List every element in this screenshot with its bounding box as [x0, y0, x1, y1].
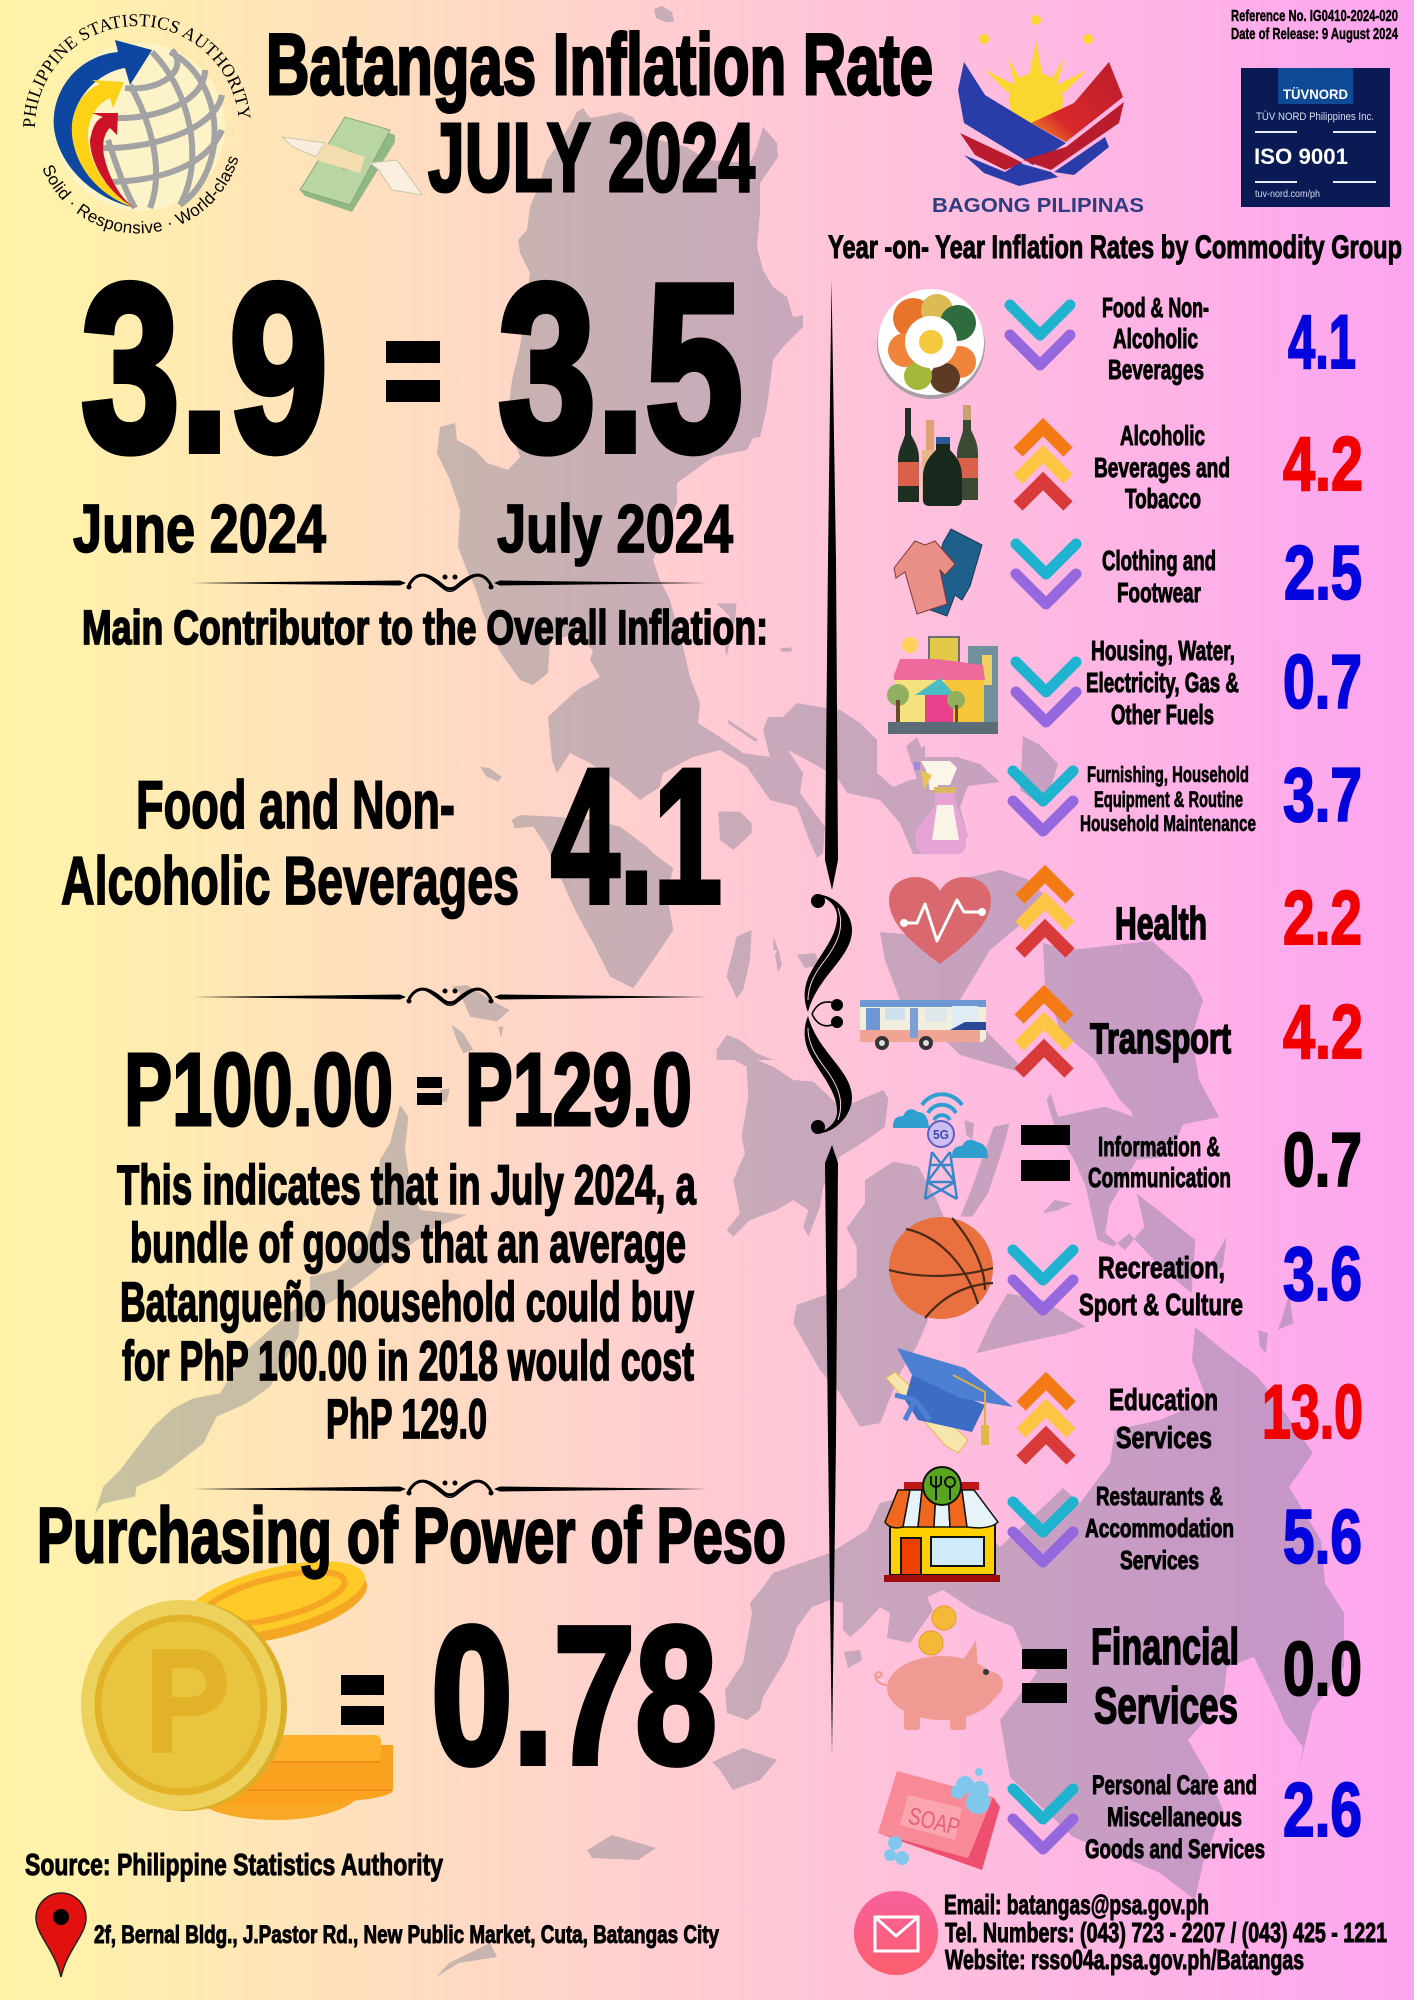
- value: 3.6: [1283, 1232, 1362, 1317]
- label: Financial: [1091, 1618, 1239, 1675]
- title: [266, 17, 933, 212]
- label: Information &: [1098, 1131, 1220, 1162]
- label: [1086, 635, 1239, 730]
- value: 0.0: [1283, 1627, 1362, 1712]
- explanatory paragraph: for PhP 100.00 in 2018 would cost: [122, 1329, 694, 1392]
- row: information and communication: [893, 1094, 1362, 1203]
- logo: Bagong Pilipinas: [932, 15, 1144, 217]
- label: [1088, 1131, 1231, 1193]
- heading: purchasing power of peso: Purchasing of Power of Peso: [37, 1491, 786, 1579]
- label: Other Fuels: [1111, 699, 1214, 730]
- row: housing, water, electricity, gas and other fuels: [887, 635, 1362, 734]
- label: Beverages: [1108, 354, 1204, 385]
- title: JULY 2024: [428, 103, 755, 212]
- row: clothing and footwear: [894, 529, 1362, 616]
- label: Communication: [1088, 1162, 1231, 1193]
- row: transport: [860, 990, 1363, 1075]
- icon: food plate: [877, 289, 985, 399]
- row: food and non-alcoholic beverages: [877, 289, 1356, 399]
- label: Household Maintenance: [1080, 811, 1256, 836]
- main contributor: food and non-alcoholic beverages: 4.1: [551, 730, 722, 943]
- label: Services: [1116, 1420, 1212, 1455]
- value: 13.0: [1262, 1370, 1363, 1455]
- icon: bottles: [898, 405, 978, 506]
- row: education services: [886, 1348, 1363, 1460]
- main contributor: food and non-alcoholic beverages: [61, 730, 722, 943]
- badge: TUV NORD ISO 9001: TÜVNORD: [1283, 86, 1348, 102]
- main contributor: food and non-alcoholic beverages: Food and Non-: [136, 767, 455, 843]
- icon: bus: [860, 1000, 986, 1050]
- label: [1091, 1618, 1239, 1734]
- headline: inflation rate comparison: [73, 236, 743, 567]
- label: Alcoholic: [1113, 323, 1198, 354]
- logo: Philippine Statistics Authority: [23, 14, 250, 234]
- label: Alcoholic: [1120, 420, 1205, 451]
- icon: winged money: [282, 117, 422, 212]
- label: [1102, 545, 1216, 608]
- peso comparison: P129.0: [465, 1032, 692, 1147]
- icon: 5G tower: 5G: [933, 1127, 949, 1142]
- trend: down: [1013, 1789, 1073, 1849]
- value: 3.7: [1283, 753, 1362, 838]
- trend: up: [1021, 1381, 1071, 1460]
- heading: main contributor: Main Contributor to the Overall Inflation:: [82, 602, 768, 655]
- label: [1109, 1382, 1218, 1455]
- label: Food & Non-: [1102, 292, 1209, 323]
- value: 0.7: [1283, 640, 1362, 725]
- label: Recreation,: [1098, 1250, 1225, 1285]
- row: alcoholic beverages and tobacco: [898, 405, 1363, 514]
- headline: inflation rate comparison: 3.5: [498, 236, 743, 501]
- icon: basketball: [889, 1217, 993, 1319]
- badge: TUV NORD ISO 9001: TÜV NORD Philippines Inc.: [1256, 111, 1374, 123]
- contact details: Email: batangas@psa.gov.ph: [944, 1889, 1209, 1920]
- icon: heart with pulse: [889, 877, 991, 964]
- value: 4.1: [1288, 300, 1356, 385]
- value: 5.6: [1283, 1495, 1362, 1580]
- label: Services: [1094, 1677, 1238, 1734]
- label: Equipment & Routine: [1094, 787, 1243, 812]
- explanatory paragraph: This indicates that in July 2024, a: [117, 1153, 697, 1216]
- purchasing power value: [341, 1586, 717, 1805]
- headline: inflation rate comparison: July 2024: [497, 491, 733, 567]
- label: Services: [1120, 1545, 1199, 1575]
- trend: down: [1013, 1250, 1073, 1310]
- label: Sport & Culture: [1079, 1287, 1243, 1322]
- trend: up: [1020, 874, 1070, 953]
- label: [1094, 420, 1230, 514]
- value: 4.2: [1283, 990, 1363, 1075]
- row: restaurants and accommodation services: [884, 1467, 1362, 1582]
- label: [1080, 762, 1256, 836]
- trend: unchanged: [1021, 1125, 1070, 1181]
- label: [1085, 1770, 1265, 1864]
- row: personal care and miscellaneous goods and services: [878, 1768, 1362, 1870]
- peso comparison: [124, 1032, 692, 1147]
- label: Health: [1115, 898, 1207, 949]
- value: 2.5: [1284, 531, 1362, 616]
- trend: up: [1019, 994, 1069, 1073]
- label: [1102, 292, 1209, 385]
- value: 0.7: [1283, 1118, 1362, 1203]
- purchasing power value: 0.78: [431, 1586, 717, 1805]
- explanatory paragraph: [117, 1153, 697, 1450]
- trend: down: [1010, 305, 1070, 365]
- logo: Philippine Statistics Authority: Solid · Responsive · World-class: [43, 156, 238, 234]
- label: Personal Care and: [1092, 1770, 1257, 1800]
- icon: piggy bank: [875, 1606, 1003, 1730]
- row: recreation, sport and culture: [889, 1217, 1362, 1322]
- explanatory paragraph: PhP 129.0: [326, 1387, 487, 1450]
- row: furnishing, household equipment and routine household maintenance: [914, 753, 1362, 854]
- label: Goods and Services: [1085, 1834, 1265, 1864]
- label: Miscellaneous: [1107, 1802, 1242, 1832]
- row: health: [889, 874, 1362, 964]
- icon: spray bottle: [914, 761, 966, 854]
- address: 2f, Bernal Bldg., J.Pastor Rd., New Public Market, Cuta, Batangas City: [94, 1921, 719, 1949]
- label: Restaurants &: [1096, 1481, 1223, 1511]
- label: Clothing and: [1102, 545, 1216, 576]
- icon: location pin: [36, 1893, 86, 1977]
- label: Housing, Water,: [1091, 635, 1235, 666]
- icon: 5G tower: [893, 1094, 988, 1199]
- label: Footwear: [1117, 577, 1201, 608]
- badge: TUV NORD ISO 9001: ISO 9001: [1254, 144, 1348, 169]
- icon: soap: SOAP: [906, 1803, 963, 1841]
- label: Electricity, Gas &: [1086, 667, 1239, 698]
- badge: TUV NORD ISO 9001: tuv-nord.com/ph: [1255, 189, 1320, 200]
- peso comparison: P100.00: [124, 1032, 393, 1147]
- headline: inflation rate comparison: June 2024: [73, 491, 326, 567]
- trend: unchanged: [1022, 1649, 1067, 1703]
- row: financial services: [875, 1606, 1362, 1734]
- trend: down: [1016, 662, 1076, 722]
- icon: mail: [854, 1891, 938, 1975]
- explanatory paragraph: bundle of goods that an average: [130, 1211, 686, 1274]
- label: Tobacco: [1125, 483, 1201, 514]
- label: Beverages and: [1094, 452, 1230, 483]
- badge: TUV NORD ISO 9001: [1241, 68, 1390, 207]
- label: Transport: [1090, 1015, 1231, 1063]
- value: 2.6: [1283, 1768, 1362, 1853]
- trend: down: [1016, 544, 1076, 604]
- icon: buildings: [887, 637, 998, 734]
- explanatory paragraph: Batangueño household could buy: [120, 1270, 694, 1333]
- trend: down: [1013, 1502, 1073, 1562]
- divider: [192, 1480, 708, 1497]
- label: [1079, 1250, 1243, 1322]
- logo: Philippine Statistics Authority: PHILIPPINE STATISTICS AUTHORITY: [23, 14, 250, 148]
- label: Furnishing, Household: [1087, 762, 1249, 787]
- icon: shirt and jeans: [894, 529, 982, 616]
- title: Batangas Inflation Rate: [266, 17, 933, 113]
- value: 4.2: [1283, 422, 1363, 507]
- label: Accommodation: [1085, 1513, 1234, 1543]
- reference number and release date: [1231, 8, 1398, 43]
- icon: restaurant storefront: [884, 1467, 1000, 1582]
- label: [1085, 1481, 1234, 1575]
- logo: Bagong Pilipinas: BAGONG PILIPINAS: [932, 195, 1144, 217]
- trend: up: [1018, 427, 1068, 506]
- divider: [192, 574, 708, 591]
- label: Education: [1109, 1382, 1218, 1417]
- central divider with brace: [805, 280, 852, 1755]
- value: 2.2: [1283, 876, 1362, 961]
- icon: gold coins: [81, 1546, 393, 1820]
- contact details: [944, 1889, 1387, 1975]
- divider: [192, 988, 708, 1005]
- headline: inflation rate comparison: 3.9: [81, 236, 328, 501]
- icon: soap: [878, 1768, 1000, 1870]
- icon: graduation cap and diploma: [886, 1348, 1013, 1453]
- source: Source: Philippine Statistics Authority: [25, 1847, 444, 1882]
- main contributor: food and non-alcoholic beverages: Alcoholic Beverages: [61, 843, 519, 919]
- trend: down: [1013, 771, 1073, 831]
